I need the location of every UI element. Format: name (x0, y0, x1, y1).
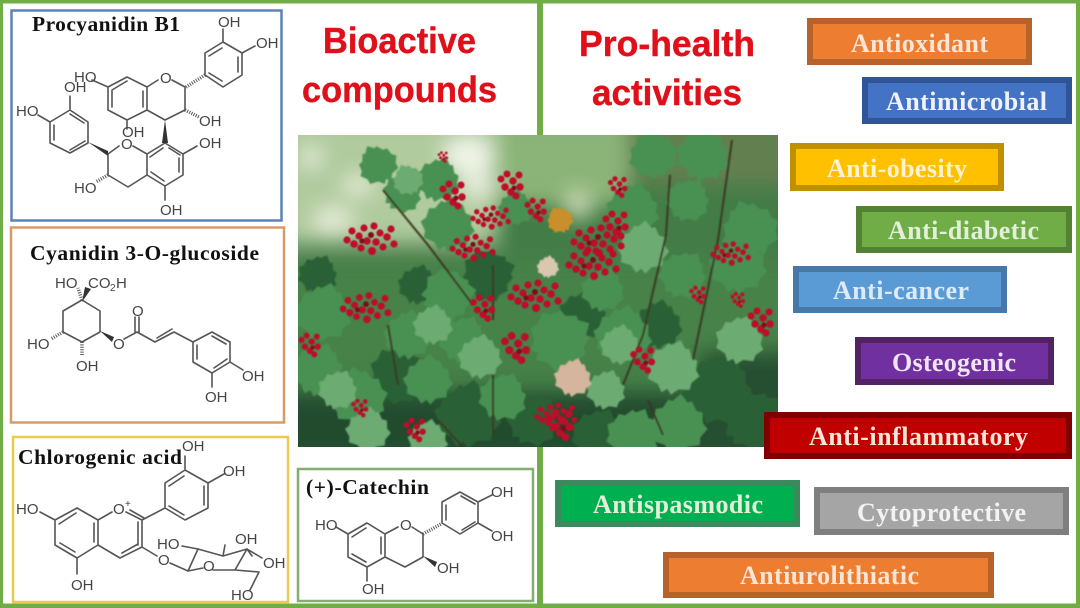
badge: Anti-obesity: Anti-obesity (827, 154, 967, 183)
structure: Procyanidin B1 (16, 14, 278, 219)
structure: Cyanidin 3-O-glucoside: 2 (110, 283, 116, 294)
structure: Chlorogenic acid: HO (16, 501, 38, 518)
badge: Anti-inflammatory: Anti-inflammatory (809, 422, 1028, 451)
badge: Anti-cancer: Anti-cancer (833, 276, 969, 305)
structure: Chlorogenic acid: OH (182, 438, 204, 455)
structure: Procyanidin B1: HO (74, 180, 96, 197)
badge: Antioxidant: Antioxidant (851, 29, 988, 58)
structure: Procyanidin B1: OH (199, 113, 222, 130)
structure: Cyanidin 3-O-glucoside: OH (242, 368, 264, 385)
badge: Antimicrobial (865, 80, 1069, 121)
structure: Cyanidin 3-O-glucoside: O (132, 303, 144, 320)
berry clusters (299, 151, 774, 442)
structure: (+)-Catechin: OH (437, 560, 460, 577)
structure: Cyanidin 3-O-glucoside: O (113, 336, 125, 353)
structure: Procyanidin B1: OH (199, 135, 222, 152)
structure: Procyanidin B1: OH (256, 35, 278, 52)
structure: Chlorogenic acid: O (113, 501, 125, 518)
badge: Anti-cancer (796, 269, 1004, 310)
heading: Bioactive compounds: compounds (302, 69, 497, 110)
panel: Chlorogenic acid (13, 437, 288, 604)
structure: Cyanidin 3-O-glucoside (27, 275, 264, 406)
structure: Chlorogenic acid: OH (223, 463, 246, 480)
structure: Chlorogenic acid: O (203, 558, 215, 575)
badge: Cytoprotective: Cytoprotective (857, 498, 1026, 527)
badge: Osteogenic: Osteogenic (892, 348, 1016, 377)
structure: Procyanidin B1: OH (160, 202, 182, 219)
structure: (+)-Catechin: O (400, 517, 412, 534)
structure: Cyanidin 3-O-glucoside: OH (76, 358, 98, 375)
dark back leaves (291, 239, 799, 471)
badge: Antioxidant (810, 21, 1029, 62)
structure: Cyanidin 3-O-glucoside: HO (27, 336, 50, 353)
label: Cyanidin 3-O-glucoside: Cyanidin 3-O-glucoside (30, 241, 259, 265)
label: Procyanidin B1: Procyanidin B1 (32, 12, 180, 36)
badge: Antiurolithiatic: Antiurolithiatic (740, 561, 919, 590)
badge: Cytoprotective (817, 490, 1066, 532)
badge: Antiurolithiatic (666, 555, 991, 595)
mid leaves (283, 118, 788, 471)
badge: Anti-diabetic: Anti-diabetic (888, 216, 1039, 245)
structure: Procyanidin B1: OH (64, 79, 86, 96)
panel: Cyanidin 3-O-glucoside (11, 228, 284, 422)
structure: Cyanidin 3-O-glucoside: OH (205, 389, 228, 406)
structure: Procyanidin B1: O (121, 136, 133, 153)
panel: Procyanidin B1 (12, 10, 282, 220)
structure: Cyanidin 3-O-glucoside: HO (55, 275, 78, 292)
badge: Antispasmodic (558, 483, 797, 524)
structure: (+)-Catechin: OH (362, 581, 384, 598)
heading: Pro-health activities: activities (592, 72, 742, 113)
photo: guelder rose shrub with red berries (298, 135, 778, 447)
structure: Chlorogenic acid: OH (263, 555, 286, 572)
structure: Procyanidin B1: HO (16, 103, 38, 120)
structure: Cyanidin 3-O-glucoside: CO (88, 275, 110, 292)
heading: Pro-health activities (579, 23, 755, 113)
structure: Chlorogenic acid: OH (235, 531, 258, 548)
panel: (+)-Catechin (298, 469, 533, 601)
structure: (+)-Catechin (315, 484, 514, 598)
badge: Antimicrobial: Antimicrobial (886, 87, 1047, 116)
structure: Chlorogenic acid: O (158, 552, 170, 569)
badge: Antispasmodic: Antispasmodic (593, 490, 763, 519)
structure: Procyanidin B1: OH (218, 14, 240, 31)
heading: Pro-health activities: Pro-health (579, 23, 755, 64)
stems (383, 140, 732, 447)
structure: Cyanidin 3-O-glucoside: H (116, 275, 127, 292)
structure: (+)-Catechin: OH (491, 484, 514, 501)
label: Chlorogenic acid: Chlorogenic acid (18, 445, 182, 469)
badge: Anti-inflammatory (767, 415, 1069, 456)
structure: Procyanidin B1: O (160, 70, 172, 87)
structure: Chlorogenic acid: + (125, 499, 131, 510)
structure: Chlorogenic acid: OH (71, 577, 94, 594)
badge: Osteogenic (858, 340, 1051, 382)
heading: Bioactive compounds: Bioactive (323, 20, 476, 61)
structure: Chlorogenic acid (16, 438, 286, 604)
badge: Anti-diabetic (859, 209, 1069, 250)
light leaves (311, 158, 773, 463)
structure: Chlorogenic acid: HO (231, 587, 254, 604)
structure: Chlorogenic acid: HO (157, 536, 180, 553)
structure: (+)-Catechin: OH (491, 528, 514, 545)
badge: Anti-obesity (793, 146, 1001, 188)
label: (+)-Catechin: (+)-Catechin (306, 475, 429, 499)
structure: Procyanidin B1: HO (74, 69, 96, 86)
structure: (+)-Catechin: HO (315, 517, 338, 534)
structure: Procyanidin B1: OH (122, 124, 144, 141)
heading: Bioactive compounds (302, 20, 497, 110)
